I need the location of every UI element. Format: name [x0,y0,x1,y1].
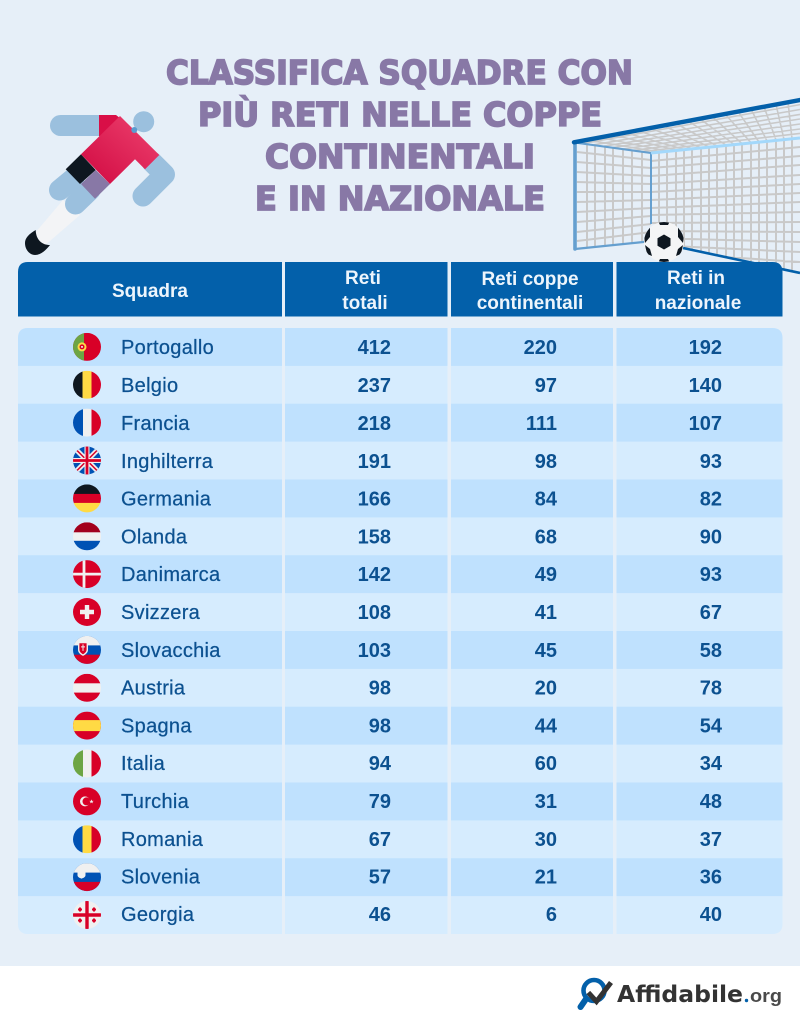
row: Italia: 94 [369,753,392,775]
flag: Olanda [73,522,101,551]
logo: Affidabile.org [580,980,782,1008]
row: Slovacchia: 58 [700,640,722,662]
row: Portogallo: 192 [689,337,722,359]
row: Spagna: 44 [535,716,558,738]
row: Portogallo: Portogallo [121,337,214,359]
header: Reti totali: totali [342,293,388,314]
flag: Georgia [73,901,101,929]
icon: football [644,221,684,263]
row: Belgio: Belgio [121,375,178,397]
table body [18,328,783,934]
row: Olanda: 68 [535,526,557,548]
row: Slovacchia: Slovacchia [121,640,221,662]
row: Germania [18,480,783,517]
flag: Svizzera [73,598,101,626]
row: Spagna: 54 [700,716,723,738]
row: Portogallo [18,328,783,366]
row: Romania: 37 [700,829,722,851]
row: Belgio: 237 [358,375,391,397]
row: Slovenia: 57 [369,866,391,888]
row: Turchia: 79 [369,791,391,813]
row: Svizzera: 41 [535,602,557,624]
row: Belgio: 140 [689,375,722,397]
header: Reti totali: Reti [345,268,381,289]
row: Portogallo: 412 [358,337,391,359]
flag: Slovenia [73,863,101,892]
row: Inghilterra: 93 [700,451,722,473]
row: Belgio: 97 [535,375,557,397]
row: Georgia: 40 [700,904,722,926]
row: Olanda: 158 [358,526,391,548]
title: CONTINENTALI [265,137,535,176]
row: Italia: 60 [535,753,557,775]
row: Danimarca: 93 [700,564,722,586]
header: Reti in nazionale [616,262,782,316]
row: Olanda: 90 [700,526,722,548]
row: Germania: Germania [121,488,212,510]
row: Slovenia [18,858,783,896]
table header [18,262,782,316]
icon: football player [25,111,164,255]
flag: Portogallo [73,333,101,361]
row: Francia [18,404,783,442]
row: Slovenia: 36 [700,866,722,888]
title: E IN NAZIONALE [255,179,545,218]
row: Romania: 30 [535,829,557,851]
row: Francia: 218 [358,413,391,435]
row: Slovacchia: 103 [358,640,391,662]
logo: Affidabile.org: Affidabile [617,982,743,1008]
row: Inghilterra [73,446,722,474]
row: Romania: Romania [121,829,204,851]
row: Belgio [73,371,722,399]
row: Austria [73,674,722,703]
row: Olanda [73,522,722,551]
row: Romania [73,825,722,853]
icon: goal net [574,100,800,274]
row: Turchia: 48 [700,791,722,813]
flag: Austria [73,674,101,703]
row: Danimarca: 142 [358,564,391,586]
row: Georgia: 6 [546,904,557,926]
row: Georgia [73,901,722,929]
row: Turchia: 31 [535,791,557,813]
header: Reti coppe continentali [451,262,613,316]
flag: Turchia [73,787,101,815]
row: Italia: Italia [121,753,166,775]
row: Inghilterra: Inghilterra [121,451,214,473]
row: Svizzera [73,598,722,626]
icon: magnifier with check [580,980,611,1007]
row: Spagna: 98 [369,716,391,738]
row: Austria: 78 [700,678,722,700]
row: Svizzera: Svizzera [121,602,201,624]
header: Reti coppe continentali: Reti coppe [481,269,579,290]
row: Inghilterra: 191 [358,451,391,473]
flag: Romania [73,825,102,853]
row: Danimarca [18,555,783,593]
flag: Belgio [73,371,102,399]
title: PIÙ RETI NELLE COPPE [198,94,602,134]
row: Danimarca: Danimarca [121,564,221,586]
row: Austria: Austria [121,678,186,700]
row: Spagna [18,707,783,745]
row: Svizzera: 108 [358,602,391,624]
row: Svizzera: 67 [700,602,722,624]
header: Reti in nazionale: Reti in [667,268,725,289]
flag: Francia [73,409,102,437]
row: Slovenia: Slovenia [121,866,201,888]
row: Turchia [18,782,783,820]
row: Germania: 166 [358,488,391,510]
row: Austria: 20 [535,678,557,700]
row: Olanda: Olanda [121,526,188,548]
row: Slovacchia: 45 [535,640,557,662]
header: Reti coppe continentali: continentali [477,293,583,314]
row: Francia: 107 [689,413,722,435]
row: Slovenia: 21 [535,866,557,888]
row: Georgia: 46 [369,904,391,926]
logo: Affidabile.org: org [750,986,782,1006]
row: Spagna: Spagna [121,716,192,738]
row: Germania: 84 [535,488,558,510]
row: Portogallo: 220 [524,337,557,359]
header: Reti totali [285,262,448,316]
title: CLASSIFICA SQUADRE CON [166,53,633,92]
row: Francia: 111 [526,413,557,435]
flag: Germania [73,484,101,513]
row: Georgia: Georgia [121,904,195,926]
row: Turchia: Turchia [121,791,190,813]
row: Austria: 98 [369,678,391,700]
header: Reti in nazionale: nazionale [655,293,741,314]
header: Squadra: Squadra [112,281,188,302]
row: Germania: 82 [700,488,722,510]
flag: Spagna [73,712,101,740]
flag: Italia [73,750,102,778]
row: Italia: 34 [700,753,723,775]
title [166,53,633,218]
row: Slovacchia [18,631,783,669]
row: Danimarca: 49 [535,564,557,586]
header: Squadra [18,262,282,316]
row: Inghilterra: 98 [535,451,557,473]
flag: Inghilterra [73,446,101,474]
row: Francia: Francia [121,413,190,435]
row: Romania: 67 [369,829,391,851]
flag: Slovacchia [73,636,101,665]
flag: Danimarca [73,560,101,588]
row: Italia [73,750,723,778]
